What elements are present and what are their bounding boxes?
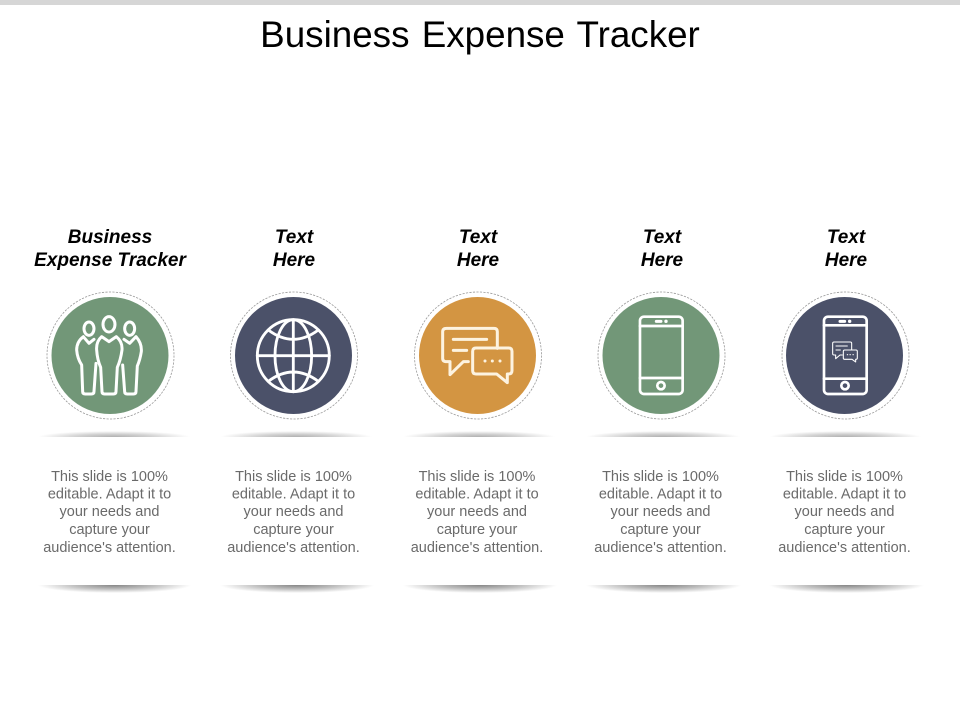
- heading: column 3: Text: [459, 227, 498, 248]
- description: column 4: This slide is 100%: [602, 469, 719, 485]
- heading: column 1: Business: [68, 227, 152, 248]
- description: column 3: This slide is 100%: [419, 469, 536, 485]
- icon: three people: [77, 317, 141, 394]
- heading: column 2: Text: [275, 227, 314, 248]
- orange circle: column 3: [419, 297, 536, 414]
- description: column 5: This slide is 100%: [786, 469, 903, 485]
- heading: column 4: Here: [641, 250, 684, 271]
- heading: column 5: Text: [827, 227, 866, 248]
- description: column 5: editable. Adapt it to: [783, 486, 906, 502]
- dashed ring: column 2: [230, 292, 358, 419]
- lower shadow: column 2: [220, 585, 374, 593]
- description: column 4: capture your: [620, 522, 701, 538]
- description: column 5: audience's attention.: [778, 540, 911, 556]
- lower shadow: column 4: [586, 585, 741, 593]
- description: column 1: editable. Adapt it to: [48, 486, 171, 502]
- description: column 2: editable. Adapt it to: [232, 486, 355, 502]
- shadow under circle: column 1: [38, 431, 190, 437]
- description: column 4: your needs and: [611, 504, 710, 520]
- heading: column 3: Here: [457, 250, 500, 271]
- icon: globe: [257, 320, 329, 392]
- top bar: [0, 0, 960, 5]
- description: column 4: editable. Adapt it to: [599, 486, 722, 502]
- lower shadow: column 5: [769, 585, 924, 593]
- panel: phone with chat: [769, 227, 924, 593]
- navy circle: column 2: [235, 297, 352, 414]
- lower shadow: column 3: [403, 585, 557, 593]
- description: column 1: This slide is 100%: [51, 469, 168, 485]
- dashed ring: column 3: [414, 292, 542, 419]
- navy circle: column 5: [786, 297, 903, 414]
- panel: business expense tracker: [34, 227, 191, 593]
- icon: phone with speech bubbles: [824, 317, 867, 394]
- shadow under circle: column 3: [403, 431, 555, 437]
- description: column 3: audience's attention.: [411, 540, 543, 556]
- description: column 5: capture your: [804, 522, 885, 538]
- description: column 4: audience's attention.: [594, 540, 727, 556]
- description: column 3: capture your: [437, 522, 517, 538]
- heading: column 5: Here: [825, 250, 868, 271]
- lower shadow: column 1: [38, 585, 191, 593]
- icon: speech bubbles: [443, 328, 512, 383]
- green circle: column 4: [602, 297, 720, 414]
- panel: smartphone: [586, 227, 741, 593]
- description: column 2: audience's attention.: [227, 540, 360, 556]
- dashed ring: column 5: [782, 292, 909, 419]
- description: column 2: capture your: [253, 522, 334, 538]
- description: column 5: your needs and: [795, 504, 894, 520]
- description: column 1: capture your: [69, 522, 150, 538]
- description: column 2: This slide is 100%: [235, 469, 352, 485]
- shadow under circle: column 2: [220, 431, 372, 437]
- icon: smartphone: [640, 317, 683, 394]
- panel: globe: [220, 227, 374, 593]
- description: column 3: your needs and: [427, 504, 527, 520]
- panel: chat: [403, 227, 557, 593]
- description: column 2: your needs and: [244, 504, 343, 520]
- dashed ring: column 4: [598, 292, 725, 419]
- heading: column 4: Text: [643, 227, 682, 248]
- heading: column 2: Here: [273, 250, 316, 271]
- dashed ring: column 1: [47, 292, 174, 419]
- description: column 3: editable. Adapt it to: [415, 486, 539, 502]
- description: column 1: audience's attention.: [43, 540, 176, 556]
- green circle: column 1: [52, 297, 168, 414]
- description: column 1: your needs and: [60, 504, 159, 520]
- shadow under circle: column 5: [769, 431, 921, 437]
- shadow under circle: column 4: [586, 431, 740, 437]
- heading: column 1: Expense Tracker: [34, 250, 187, 271]
- title: Business Expense Tracker: [260, 14, 700, 55]
